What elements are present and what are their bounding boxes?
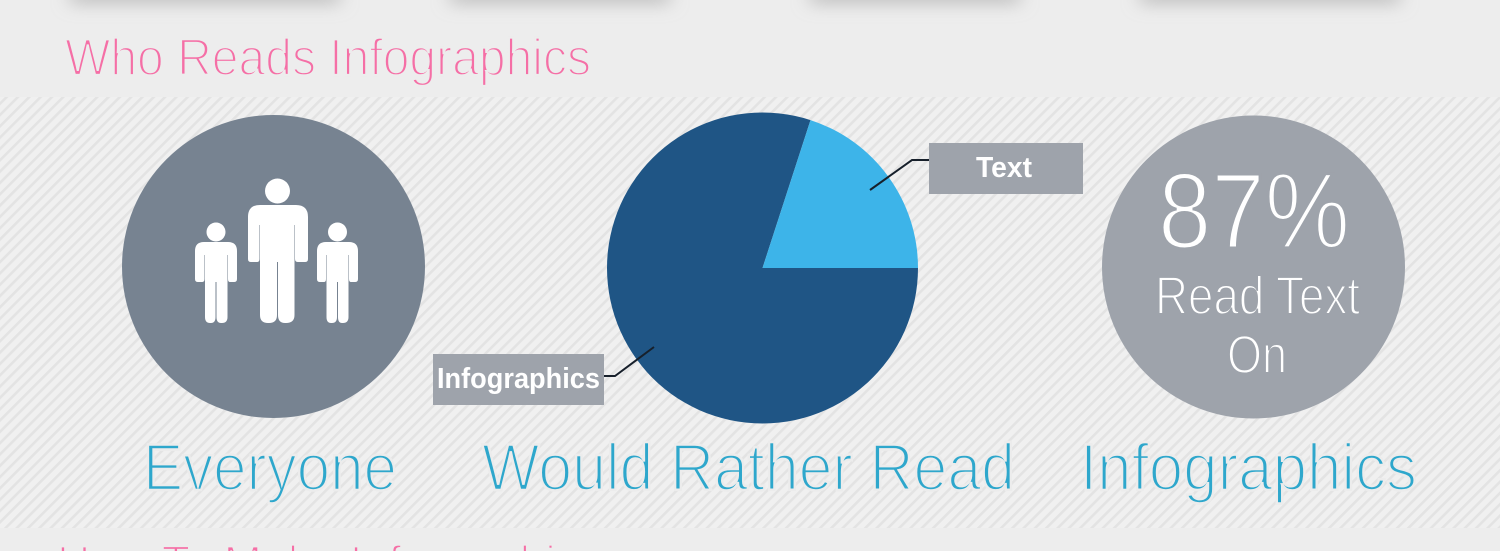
leader line: infographics xyxy=(604,347,654,376)
icon: three people xyxy=(195,178,358,323)
label: text: Text xyxy=(976,152,1032,184)
leader line: text xyxy=(870,160,929,190)
panel: everyone circle with people icon xyxy=(122,115,425,418)
label: infographics: Infographics xyxy=(437,363,600,395)
panel: 87 percent circle xyxy=(1102,116,1405,418)
pie slice: text xyxy=(762,120,918,268)
caption: would rather read: Would Rather Read xyxy=(482,430,1015,504)
caption: infographics: Infographics xyxy=(1080,430,1417,504)
title: Who Reads Infographics: Who Reads Infographics xyxy=(65,29,591,87)
label: infographics xyxy=(433,354,604,405)
stat caption: read text: Read Text xyxy=(1155,266,1360,326)
caption: everyone: Everyone xyxy=(143,430,397,504)
pie chart: infographics vs text xyxy=(604,113,929,424)
label: text xyxy=(929,143,1083,194)
stat caption: on: On xyxy=(1227,325,1287,385)
hatched band background xyxy=(0,97,1500,528)
stat: 87%: 87% xyxy=(1158,150,1350,271)
